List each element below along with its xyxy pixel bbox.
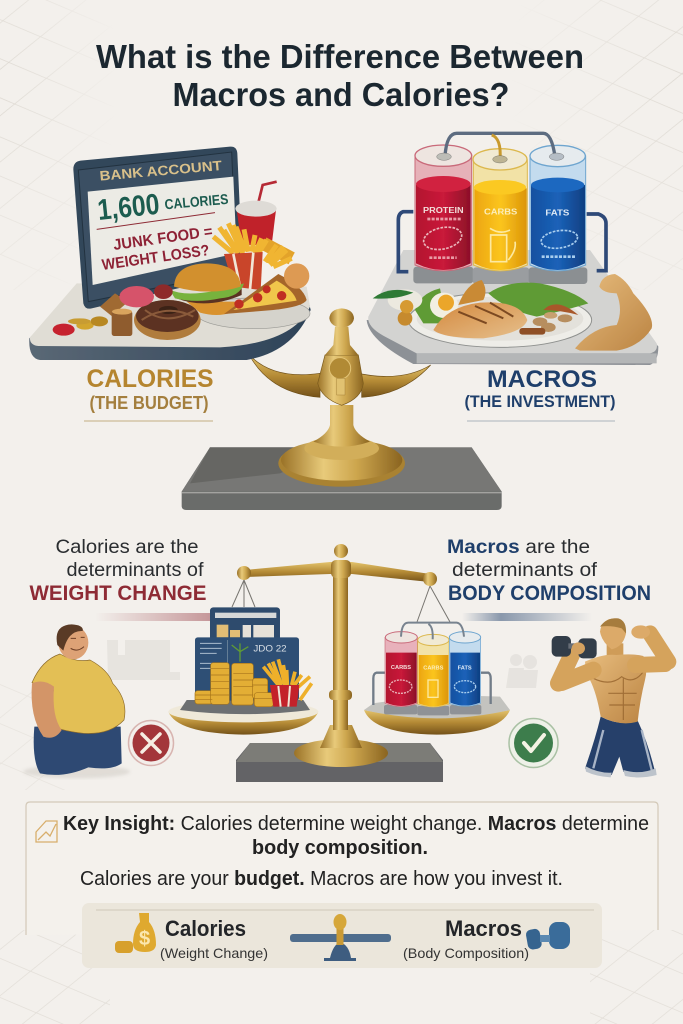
connecting pipes xyxy=(437,133,564,163)
pan xyxy=(168,712,318,735)
head xyxy=(600,618,626,649)
title: Macros and Calories? xyxy=(172,76,510,113)
carbs tank: CARBS xyxy=(484,207,518,216)
calories legend: Calories xyxy=(165,916,246,941)
text: macros determine body composition xyxy=(447,537,651,621)
text: calories determine weight change: determinants of xyxy=(66,560,204,581)
budget sentence: Calories are your budget. Macros are how you invest it. xyxy=(80,868,563,890)
label: macros the investment: MACROS xyxy=(487,366,597,393)
dashboard xyxy=(195,607,299,701)
central housing and finial xyxy=(318,308,363,405)
bank account screen: 1,600 xyxy=(96,188,161,227)
label: calories the budget xyxy=(84,365,214,421)
key insight sentence: Key Insight: Calories determine weight change. Macros determine xyxy=(63,813,649,835)
label: calories the budget: (THE BUDGET) xyxy=(90,393,208,413)
small red tank: CARBS xyxy=(391,665,411,671)
golden bicep xyxy=(575,274,652,351)
macros legend: Macros xyxy=(445,916,522,941)
coin stacks xyxy=(195,663,273,707)
summary strip: (Weight Change) xyxy=(160,945,268,961)
fries xyxy=(263,659,312,707)
scale base xyxy=(236,743,443,782)
carbs tank xyxy=(473,149,527,271)
glazed pastry xyxy=(284,263,309,289)
protein tank xyxy=(415,145,472,271)
left tray: calories budget xyxy=(29,147,311,360)
icon: blue dumbbell xyxy=(525,922,570,950)
text: macros determine body composition: Macros are the xyxy=(447,537,590,558)
scale column xyxy=(333,570,348,730)
key insight continuation: body composition. xyxy=(252,837,428,859)
right pan: macro tanks xyxy=(364,623,510,735)
torso xyxy=(585,654,646,723)
fats tank xyxy=(530,145,586,271)
small blue tank: FATS xyxy=(458,665,472,671)
label: macros the investment: (THE INVESTMENT) xyxy=(464,393,616,411)
cross badge xyxy=(128,720,174,766)
healthy meal plate xyxy=(373,280,592,347)
stone slab xyxy=(182,447,502,510)
pizza xyxy=(224,274,307,314)
tray xyxy=(29,283,311,360)
fats tank: FATS xyxy=(545,208,570,217)
overweight man xyxy=(23,624,130,778)
protein tank: PROTEIN xyxy=(423,206,464,215)
bank account screen: CALORIES xyxy=(164,192,229,213)
small blue tank xyxy=(449,632,481,706)
text: calories determine weight change xyxy=(30,537,210,621)
bank account screen: JUNK FOOD = xyxy=(112,223,214,254)
text: calories determine weight change: Calories are the xyxy=(56,537,198,558)
icon: small balance xyxy=(290,914,391,961)
jeans xyxy=(34,727,122,775)
summary strip: (Body Composition) xyxy=(403,945,529,961)
lower balance scale xyxy=(232,544,450,782)
icon: rising chart note xyxy=(36,821,57,842)
text: macros determine body composition: determinants of xyxy=(452,560,598,581)
bank account screen: BANK ACCOUNT xyxy=(99,158,223,184)
arm xyxy=(32,681,62,738)
base xyxy=(278,405,405,487)
icon: coins and money bag: $ xyxy=(139,928,150,950)
donut xyxy=(134,300,201,340)
title xyxy=(96,38,584,113)
small treats xyxy=(53,284,173,336)
small yellow tank: CARBS xyxy=(423,666,444,672)
panel: key insight xyxy=(26,802,658,968)
faint background silhouettes xyxy=(107,640,538,688)
side handles xyxy=(398,212,606,272)
dumbbell xyxy=(552,636,597,658)
small red tank xyxy=(385,632,417,707)
label: macros the investment xyxy=(464,366,616,421)
label: calories the budget: CALORIES xyxy=(86,365,214,393)
tank handles xyxy=(373,673,491,705)
soda cup xyxy=(235,182,277,245)
pan xyxy=(364,710,510,735)
burger xyxy=(169,263,244,315)
icon: coins and money bag xyxy=(115,913,156,953)
text: macros determine body composition: BODY COMPOSITION xyxy=(448,582,651,605)
fries xyxy=(213,223,292,290)
summary strip xyxy=(82,903,602,968)
check badge xyxy=(509,718,558,768)
small yellow tank xyxy=(418,634,449,707)
arms xyxy=(249,355,431,397)
shirt xyxy=(32,654,125,733)
tanks xyxy=(413,133,587,284)
scale beam xyxy=(245,562,430,582)
main balance scale stand xyxy=(182,308,502,510)
bank account screen: WEIGHT LOSS? xyxy=(101,242,211,274)
left arm xyxy=(558,655,593,683)
head xyxy=(58,626,88,659)
muscular man with dumbbell xyxy=(552,618,668,777)
text: calories determine weight change: WEIGHT CHANGE xyxy=(30,582,206,605)
title: What is the Difference Between xyxy=(96,38,584,75)
bank account screen xyxy=(73,147,243,309)
tray xyxy=(367,250,658,365)
right arm xyxy=(635,633,668,665)
left pan: budget and coins xyxy=(168,607,318,735)
dashboard: JDO 22 xyxy=(253,644,287,654)
shorts xyxy=(585,717,657,777)
neck xyxy=(607,643,623,660)
right tray: macros investment xyxy=(367,133,658,365)
plate xyxy=(197,298,310,329)
